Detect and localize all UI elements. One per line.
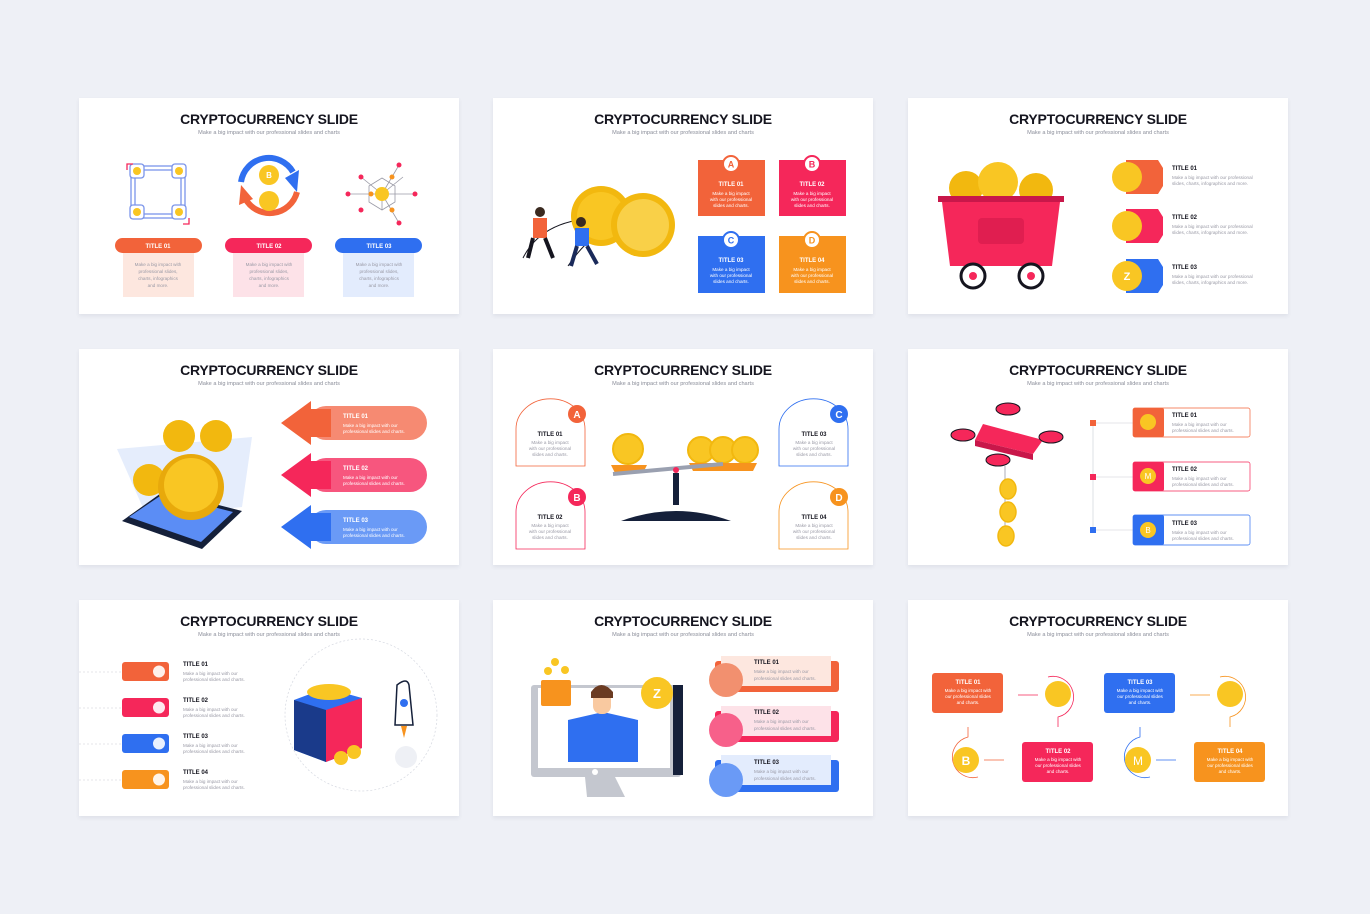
heading: Make a big impact with our professional slides and charts xyxy=(1027,130,1169,136)
item 1: TITLE 01 xyxy=(1172,166,1198,172)
box A: A xyxy=(728,160,735,170)
heading: CRYPTOCURRENCY SLIDE xyxy=(180,362,358,378)
heading: Make a big impact with our professional slides and charts xyxy=(198,381,340,387)
card D: Make a big impact xyxy=(795,523,833,528)
item 3: TITLE 03 xyxy=(1172,521,1198,527)
item 2: Make a big impact with our xyxy=(183,707,238,712)
card D: slides and charts. xyxy=(796,535,832,540)
box 1: our professional slides xyxy=(945,694,992,699)
item 3 xyxy=(1090,515,1250,545)
item 1: professional slides and charts. xyxy=(183,677,245,682)
card A: Make a big impact xyxy=(531,440,569,445)
coins: M xyxy=(1133,754,1143,768)
item 3: charts, infographics xyxy=(359,276,400,281)
box 4: our professional slides xyxy=(1207,763,1254,768)
heading xyxy=(180,613,358,638)
illustration: person with monitor xyxy=(531,658,683,797)
item 2 xyxy=(225,238,312,297)
box 4: and charts. xyxy=(1219,769,1241,774)
item 3: and more. xyxy=(369,283,389,288)
card 3: TITLE 03 xyxy=(754,760,780,766)
arrow 3: TITLE 03 xyxy=(343,518,369,524)
heading xyxy=(180,111,358,136)
heading: Make a big impact with our professional slides and charts xyxy=(1027,381,1169,387)
item 1 xyxy=(1112,160,1253,194)
card C: C xyxy=(835,410,843,421)
box D: TITLE 04 xyxy=(799,258,825,264)
card B: slides and charts. xyxy=(532,535,568,540)
box D: Make a big impact xyxy=(793,267,831,272)
item 2: Make a big impact with our professional xyxy=(1172,224,1253,229)
item 2: and more. xyxy=(259,283,279,288)
box 4: Make a big impact with xyxy=(1207,757,1254,762)
icon: exchange arrows: B xyxy=(266,171,272,180)
arrow 2: TITLE 02 xyxy=(343,466,369,472)
card D: D xyxy=(835,493,843,504)
item 2 xyxy=(1090,462,1250,491)
arrow 2: Make a big impact with our xyxy=(343,475,398,480)
heading xyxy=(594,613,772,638)
arrow 2 xyxy=(281,453,427,497)
illustration: person with monitor: Z xyxy=(653,686,661,701)
item 3: Make a big impact with our xyxy=(1172,530,1227,535)
box B: B xyxy=(809,160,816,170)
coins xyxy=(953,681,1243,773)
card 2: Make a big impact with our xyxy=(754,719,809,724)
arrow 2: professional slides and charts. xyxy=(343,481,405,486)
box 3: our professional slides xyxy=(1117,694,1164,699)
box C xyxy=(698,232,765,293)
item 1: Make a big impact with xyxy=(135,262,182,267)
card B: B xyxy=(573,493,581,504)
heading: CRYPTOCURRENCY SLIDE xyxy=(594,362,772,378)
item 2: TITLE 02 xyxy=(1172,215,1198,221)
item 3: slides, charts, infographics and more. xyxy=(1172,280,1248,285)
box D xyxy=(779,232,846,293)
item 1: Make a big impact with our professional xyxy=(1172,175,1253,180)
illustration: cube and rocket xyxy=(285,639,437,791)
card A: TITLE 01 xyxy=(537,432,563,438)
item 3: professional slides and charts. xyxy=(1172,536,1234,541)
card C: TITLE 03 xyxy=(801,432,827,438)
arrow 1 xyxy=(281,401,427,445)
card 1: Make a big impact with our xyxy=(754,669,809,674)
card C: slides and charts. xyxy=(796,452,832,457)
heading xyxy=(594,111,772,136)
heading: Make a big impact with our professional slides and charts xyxy=(198,632,340,638)
slide 2: people pulling coins, ABCD boxes xyxy=(493,98,873,314)
item 3: TITLE 03 xyxy=(183,734,209,740)
coin connectors xyxy=(952,676,1246,778)
item 1 xyxy=(1090,408,1250,437)
box C: slides and charts. xyxy=(713,279,749,284)
item 3: Make a big impact with our xyxy=(183,743,238,748)
item 1: slides, charts, infographics and more. xyxy=(1172,181,1248,186)
heading: Make a big impact with our professional slides and charts xyxy=(612,632,754,638)
item 1: professional slides, xyxy=(138,269,178,274)
item 2: Make a big impact with xyxy=(246,262,293,267)
icon: network xyxy=(346,162,418,226)
card C: with our professional xyxy=(793,446,835,451)
slide 4: phone and arrows xyxy=(79,349,459,565)
item 2: slides, charts, infographics and more. xyxy=(1172,230,1248,235)
heading: Make a big impact with our professional slides and charts xyxy=(1027,632,1169,638)
slide 9: flow boxes with coins xyxy=(908,600,1288,816)
box B xyxy=(779,156,846,216)
box A: TITLE 01 xyxy=(718,182,744,188)
item 2: TITLE 02 xyxy=(256,244,282,250)
arrow 3: Make a big impact with our xyxy=(343,527,398,532)
card 1 xyxy=(709,656,839,697)
item 3: TITLE 03 xyxy=(1172,265,1198,271)
box B: slides and charts. xyxy=(794,203,830,208)
item 2: professional slides and charts. xyxy=(1172,482,1234,487)
heading: CRYPTOCURRENCY SLIDE xyxy=(594,111,772,127)
box C: with our professional xyxy=(710,273,752,278)
card 3: Make a big impact with our xyxy=(754,769,809,774)
arrow 3: professional slides and charts. xyxy=(343,533,405,538)
box 3: and charts. xyxy=(1129,700,1151,705)
item 3: Make a big impact with our professional xyxy=(1172,274,1253,279)
item 3 xyxy=(335,238,422,297)
box 4: TITLE 04 xyxy=(1217,749,1243,755)
item 4: TITLE 04 xyxy=(183,770,209,776)
item 1: charts, infographics xyxy=(138,276,179,281)
arrow 3 xyxy=(281,505,427,549)
illustration: people and coins xyxy=(523,186,675,266)
illustration: phone with coins xyxy=(117,420,252,549)
arrow 1: TITLE 01 xyxy=(343,414,369,420)
card B: TITLE 02 xyxy=(537,515,563,521)
item 2: professional slides and charts. xyxy=(183,713,245,718)
heading: Make a big impact with our professional slides and charts xyxy=(612,381,754,387)
box 2: Make a big impact with xyxy=(1035,757,1082,762)
item 3: Z xyxy=(1124,271,1131,283)
item 2: charts, infographics xyxy=(249,276,290,281)
box A xyxy=(698,156,765,216)
item 2: M xyxy=(1145,472,1152,481)
card A xyxy=(516,399,586,466)
card 2: TITLE 02 xyxy=(754,710,780,716)
card A: A xyxy=(573,410,581,421)
box A: Make a big impact xyxy=(712,191,750,196)
item 4 xyxy=(122,770,245,790)
box 1: Make a big impact with xyxy=(945,688,992,693)
item 4: professional slides and charts. xyxy=(183,785,245,790)
box C: TITLE 03 xyxy=(718,258,744,264)
box 2: TITLE 02 xyxy=(1045,749,1071,755)
heading: CRYPTOCURRENCY SLIDE xyxy=(1009,111,1187,127)
card B: Make a big impact xyxy=(531,523,569,528)
item 1: TITLE 01 xyxy=(145,244,171,250)
box A: slides and charts. xyxy=(713,203,749,208)
card D: with our professional xyxy=(793,529,835,534)
heading: CRYPTOCURRENCY SLIDE xyxy=(1009,362,1187,378)
arrow 1: professional slides and charts. xyxy=(343,429,405,434)
card 1: TITLE 01 xyxy=(754,660,780,666)
slide 3: mining cart xyxy=(908,98,1288,314)
card B xyxy=(516,482,586,549)
box 4 xyxy=(1194,742,1265,782)
item 3: professional slides and charts. xyxy=(183,749,245,754)
item 2: TITLE 02 xyxy=(183,698,209,704)
icon: exchange arrows xyxy=(239,158,299,213)
illustration: cart with coins xyxy=(938,162,1064,288)
card A: with our professional xyxy=(529,446,571,451)
box D: slides and charts. xyxy=(794,279,830,284)
item 2: Make a big impact with our xyxy=(1172,476,1227,481)
box 1: TITLE 01 xyxy=(955,680,981,686)
heading: Make a big impact with our professional slides and charts xyxy=(198,130,340,136)
item 3: B xyxy=(1145,526,1151,535)
box D: D xyxy=(809,236,816,246)
item 1: TITLE 01 xyxy=(1172,413,1198,419)
box B: Make a big impact xyxy=(793,191,831,196)
card C: Make a big impact xyxy=(795,440,833,445)
icon: blockchain square xyxy=(127,164,189,224)
box C: C xyxy=(728,236,735,246)
card A: slides and charts. xyxy=(532,452,568,457)
card 3 xyxy=(709,755,839,797)
card D: TITLE 04 xyxy=(801,515,827,521)
box B: TITLE 02 xyxy=(799,182,825,188)
coins: B xyxy=(962,754,971,768)
illustration: scale xyxy=(611,434,758,521)
item 3 xyxy=(1112,259,1253,293)
item 3: Make a big impact with xyxy=(356,262,403,267)
item 2 xyxy=(122,698,245,718)
box A: with our professional xyxy=(710,197,752,202)
arrow 1: Make a big impact with our xyxy=(343,423,398,428)
item 3 xyxy=(122,734,245,754)
heading: CRYPTOCURRENCY SLIDE xyxy=(594,613,772,629)
card D xyxy=(779,482,848,549)
slide 7: tags, cube and rocket xyxy=(79,600,459,816)
item 3: TITLE 03 xyxy=(366,244,392,250)
item 1: professional slides and charts. xyxy=(1172,428,1234,433)
heading xyxy=(1009,111,1187,136)
card 1: professional slides and charts. xyxy=(754,676,816,681)
heading: CRYPTOCURRENCY SLIDE xyxy=(180,613,358,629)
slide 1: three icons with titles xyxy=(79,98,459,314)
card 2: professional slides and charts. xyxy=(754,726,816,731)
heading xyxy=(594,362,772,387)
item 1: Make a big impact with our xyxy=(1172,422,1227,427)
illustration: drone with coins xyxy=(951,403,1063,546)
item 3: professional slides, xyxy=(359,269,399,274)
heading: CRYPTOCURRENCY SLIDE xyxy=(1009,613,1187,629)
card C xyxy=(779,399,848,466)
item 2: TITLE 02 xyxy=(1172,467,1198,473)
box 1: and charts. xyxy=(957,700,979,705)
box 3: Make a big impact with xyxy=(1117,688,1164,693)
heading xyxy=(1009,613,1187,638)
box C: Make a big impact xyxy=(712,267,750,272)
card B: with our professional xyxy=(529,529,571,534)
box 2 xyxy=(1022,742,1093,782)
slide 5: balance scale xyxy=(493,349,873,565)
box 1 xyxy=(932,673,1003,713)
heading xyxy=(1009,362,1187,387)
box 3 xyxy=(1104,673,1175,713)
card 2 xyxy=(709,706,839,747)
box 3: TITLE 03 xyxy=(1127,680,1153,686)
heading xyxy=(180,362,358,387)
heading: CRYPTOCURRENCY SLIDE xyxy=(180,111,358,127)
item 1: Make a big impact with our xyxy=(183,671,238,676)
item 1: TITLE 01 xyxy=(183,662,209,668)
heading: Make a big impact with our professional slides and charts xyxy=(612,130,754,136)
box D: with our professional xyxy=(791,273,833,278)
connector line xyxy=(1093,423,1133,530)
item 1: and more. xyxy=(148,283,168,288)
card 3: professional slides and charts. xyxy=(754,776,816,781)
item 2 xyxy=(1112,209,1253,243)
item 4: Make a big impact with our xyxy=(183,779,238,784)
item 1 xyxy=(122,662,245,682)
item 1 xyxy=(115,238,202,297)
item 2: professional slides, xyxy=(249,269,289,274)
slide 8: person in monitor xyxy=(493,600,873,816)
box 2: and charts. xyxy=(1047,769,1069,774)
box 2: our professional slides xyxy=(1035,763,1082,768)
slide 6: drone xyxy=(908,349,1288,565)
box B: with our professional xyxy=(791,197,833,202)
